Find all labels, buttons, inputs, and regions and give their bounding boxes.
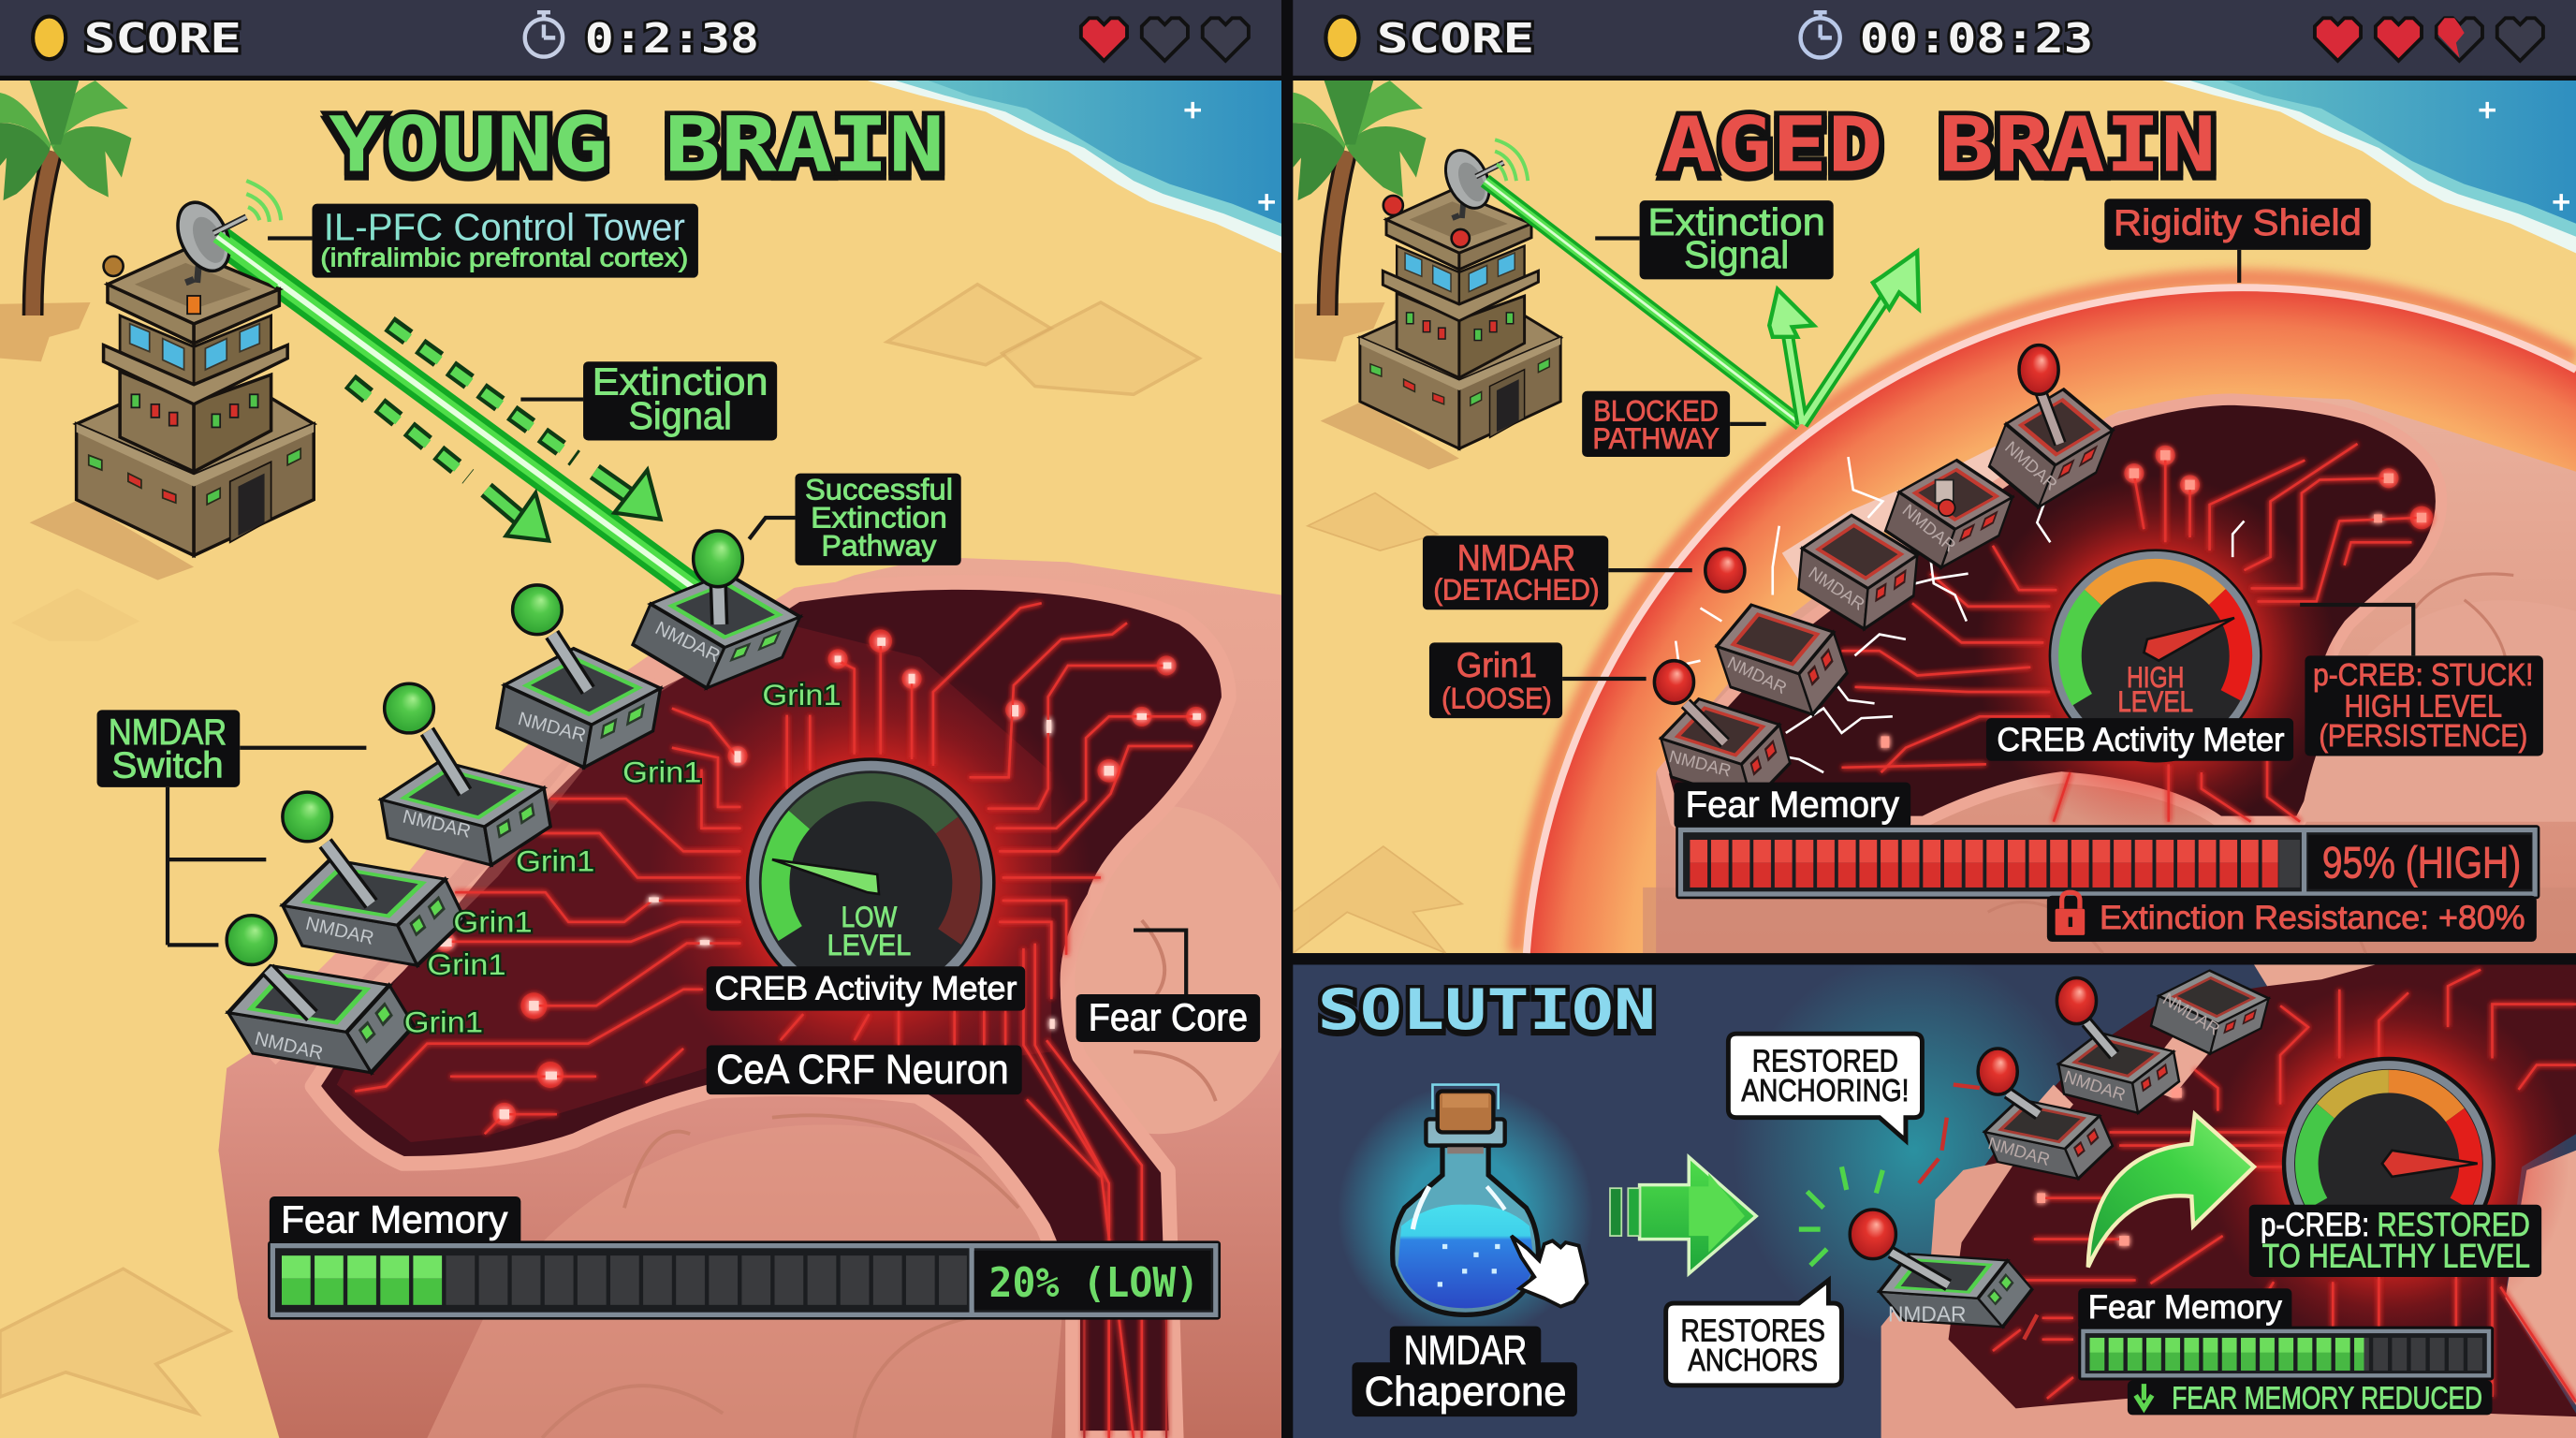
fear memory reduced note: FEAR MEMORY REDUCED — [2172, 1381, 2482, 1416]
panel: aged brain — [1271, 0, 2576, 953]
icon: down arrow — [2136, 1384, 2152, 1408]
fear memory meter: 95 percent: Fear Memory — [1686, 785, 1900, 825]
switch 3: NMDAR — [1805, 563, 1868, 614]
potion glow — [1338, 1085, 1593, 1341]
callout: Grin1 loose: (LOOSE) — [1442, 682, 1552, 715]
gauge reading — [829, 906, 911, 955]
switch 5 — [1650, 695, 1800, 806]
switch: top: NMDAR — [2159, 989, 2223, 1039]
speech bubble: restored anchoring: RESTORED — [1752, 1045, 1898, 1079]
switch: restored green — [1850, 1210, 2056, 1343]
ocean — [868, 81, 1281, 253]
Grin1 labels: Grin1 — [762, 678, 842, 712]
callout: fear core: Fear Core — [1089, 996, 1248, 1039]
speech bubble: restored anchoring — [1728, 1034, 1922, 1140]
aged tower — [1321, 139, 1560, 469]
callout: NMDAR switch: Switch — [111, 745, 224, 785]
score label: SCORE — [1377, 15, 1534, 63]
gauge needle — [772, 859, 879, 894]
extinction resistance readout — [2047, 892, 2537, 942]
switch 5: NMDAR — [253, 1029, 325, 1064]
callout: extinction signal: Signal — [1684, 233, 1789, 276]
Grin1 labels: Grin1 — [427, 947, 506, 981]
callout: successful extinction pathway: Extinction — [811, 500, 947, 534]
switch 2 — [1875, 455, 2023, 573]
Grin1 labels: Grin1 — [453, 904, 533, 938]
callout: p-CREB stuck: p-CREB: STUCK! — [2313, 658, 2533, 693]
pink band under switches — [263, 649, 690, 1051]
CREB gauge — [745, 757, 996, 966]
label: NMDAR chaperone: NMDAR — [1404, 1328, 1527, 1373]
label: NMDAR chaperone — [1352, 1327, 1577, 1416]
switch 2 — [491, 585, 666, 772]
switch 4: NMDAR — [1724, 653, 1790, 697]
extinction resistance readout: Extinction Resistance: +80% — [2100, 900, 2525, 936]
lives hearts — [2315, 18, 2543, 61]
palm tree — [1271, 81, 1426, 361]
callout: blocked pathway: BLOCKED — [1593, 393, 1719, 427]
extinction signal arrows — [350, 324, 661, 541]
callout: p-CREB stuck: HIGH LEVEL — [2345, 689, 2502, 724]
gauge needle — [2382, 1151, 2478, 1177]
callout: p-CREB stuck: (PERSISTENCE) — [2319, 719, 2527, 754]
switch 3 — [1795, 509, 1920, 635]
beach scene — [0, 81, 1298, 1438]
deflected arrows — [1769, 252, 1919, 424]
callout: Grin1 loose — [1429, 642, 1647, 718]
callout: p-CREB restored — [2249, 1205, 2541, 1277]
switch 4 — [1704, 601, 1860, 718]
Grin1 labels: Grin1 — [516, 844, 594, 877]
speech bubble: restores anchors — [1666, 1280, 1841, 1386]
switch 3: NMDAR — [401, 807, 473, 843]
gauge reading: HIGH — [2127, 660, 2184, 694]
timer: 00:08:23 — [1860, 15, 2093, 63]
callout: NMDAR detached: (DETACHED) — [1433, 573, 1600, 607]
CREB gauge — [2049, 549, 2262, 763]
neural circuit traces — [1841, 444, 2433, 822]
icon: stopwatch — [1801, 12, 1840, 57]
rigidity shield dome — [1516, 278, 2576, 953]
icon: potion flask — [1393, 1085, 1538, 1314]
callout: p-CREB stuck — [2300, 605, 2543, 756]
gauge reading: LOW — [842, 900, 897, 933]
speech bubble: restored anchoring: ANCHORING! — [1741, 1074, 1909, 1108]
fear memory meter: 20 percent: Fear Memory — [281, 1198, 508, 1241]
label: CeA CRF neuron: CeA CRF Neuron — [716, 1047, 1009, 1093]
CeA glow behind meter — [663, 675, 1081, 1045]
switch 1: NMDAR — [651, 618, 724, 667]
signal waves — [246, 181, 281, 222]
switch 1 — [631, 529, 803, 691]
Grin1 labels: Grin1 — [404, 1005, 483, 1038]
beach scene — [1271, 81, 2576, 953]
gauge: restored p-CREB — [2282, 1057, 2496, 1270]
callout: successful extinction pathway: Successful — [805, 473, 953, 506]
switch: middle — [2053, 977, 2185, 1117]
gauge needle — [2144, 618, 2234, 661]
switch 4: NMDAR — [303, 914, 375, 949]
callout: rigidity shield: Rigidity Shield — [2114, 203, 2362, 243]
title: aged brain: AGED BRAIN — [1661, 102, 2217, 190]
callout: IL-PFC control tower — [268, 204, 698, 278]
dark neuron cavity — [1662, 400, 2441, 822]
electric sparks — [1676, 457, 2244, 772]
fear memory meter: 95 percent: 95% (HIGH) — [2322, 838, 2521, 888]
switch 3 — [374, 683, 557, 868]
fear memory meter: 20 percent: 20% (LOW) — [989, 1259, 1199, 1307]
callout: NMDAR detached — [1423, 536, 1692, 609]
header bar: young brain — [0, 0, 1281, 76]
callout: extinction signal — [520, 360, 777, 440]
callout: rigidity shield — [2104, 198, 2371, 283]
neural circuit traces — [1993, 970, 2576, 1401]
title: solution: SOLUTION — [1318, 978, 1656, 1043]
Grin1 labels — [404, 678, 842, 1038]
panel: solution — [1293, 953, 2576, 1438]
label: CREB activity meter: CREB Activity Meter — [1997, 722, 2285, 758]
speech bubble: restores anchors: ANCHORS — [1688, 1343, 1818, 1378]
switch 5 — [225, 914, 416, 1076]
ocean — [2162, 81, 2576, 253]
loose knobs — [1654, 549, 1745, 703]
callout: NMDAR detached: NMDAR — [1457, 538, 1575, 579]
callout: p-CREB restored: TO HEALTHY LEVEL — [2262, 1238, 2530, 1274]
tower: IL-PFC control tower — [30, 181, 314, 580]
callout: NMDAR switch: NMDAR — [109, 712, 227, 753]
fear memory meter: 95 percent — [1674, 783, 2539, 899]
callout: successful extinction pathway — [749, 473, 961, 565]
icon: padlock — [2056, 892, 2085, 935]
brain tissue — [1643, 394, 2576, 953]
brain tissue — [218, 557, 1298, 1438]
label: NMDAR chaperone: Chaperone — [1365, 1369, 1566, 1415]
switch: restored green: NMDAR — [1888, 1301, 1967, 1326]
gauge reading: LEVEL — [2117, 684, 2193, 718]
NMDAR switches — [205, 531, 813, 1084]
callout: NMDAR switch — [97, 710, 366, 945]
switch: top — [2145, 967, 2275, 1057]
blocked green beam — [1486, 181, 1801, 424]
icon: stopwatch — [525, 12, 563, 57]
gauge reading: LEVEL — [827, 928, 911, 961]
icon: pointing hand — [1512, 1236, 1587, 1307]
sand dunes — [0, 285, 1199, 1414]
Grin1 labels: Grin1 — [622, 756, 701, 789]
callout: extinction signal: Signal — [628, 394, 732, 437]
signal waves — [1495, 139, 1528, 181]
callout: fear core — [1076, 931, 1260, 1042]
callout: successful extinction pathway: Pathway — [822, 528, 937, 562]
dark neuron cavity — [312, 582, 1229, 1438]
fear memory meter: reduced: Fear Memory — [2088, 1289, 2282, 1326]
switch 2: NMDAR — [516, 709, 588, 746]
callout: Grin1 loose: Grin1 — [1456, 646, 1537, 684]
score label: SCORE — [84, 15, 242, 63]
switch 4 — [279, 790, 467, 968]
callout: IL-PFC control tower: IL-PFC Control Tower — [324, 205, 685, 248]
speech bubble: restores anchors: RESTORES — [1680, 1313, 1825, 1348]
label: CREB activity meter: CREB Activity Meter — [714, 970, 1017, 1006]
timer: 0:2:38 — [585, 15, 759, 63]
teal glow near switch — [1734, 953, 2095, 1347]
switch: middle: NMDAR — [2062, 1066, 2128, 1105]
switch 1: NMDAR — [2001, 437, 2061, 494]
arrow: curved green rise — [2088, 1114, 2254, 1267]
callout: extinction signal — [1595, 200, 1834, 279]
header bar: aged brain — [1293, 0, 2576, 76]
fear memory meter: 20 percent — [268, 1196, 1221, 1320]
lives hearts — [1081, 18, 1249, 61]
neural circuit traces — [355, 603, 1206, 1438]
detached NMDAR switches — [1650, 345, 2126, 806]
sand dunes — [1293, 493, 1462, 953]
callout: p-CREB restored: p-CREB: RESTORED — [2261, 1207, 2530, 1243]
callout: extinction signal: Extinction — [593, 360, 768, 403]
switch: lower — [1972, 1049, 2125, 1185]
callout: IL-PFC control tower: (infralimbic prefrontal cortex) — [320, 242, 688, 271]
palm tree — [0, 81, 131, 361]
switch: lower: NMDAR — [1986, 1133, 2052, 1169]
fear memory meter: reduced — [2078, 1288, 2494, 1381]
switch 2: NMDAR — [1899, 500, 1960, 556]
switch 1 — [1976, 345, 2126, 513]
NMDAR switches being restored — [1850, 967, 2275, 1343]
gauge reading — [2117, 660, 2193, 718]
icon: score coin — [1325, 17, 1358, 59]
restoration sparks — [1799, 1085, 2037, 1340]
icon: score coin — [33, 17, 66, 59]
switch 5: NMDAR — [1667, 746, 1734, 781]
callout: extinction signal: Extinction — [1647, 200, 1825, 243]
green control beam — [218, 239, 698, 592]
brain tissue and neuron field — [1881, 964, 2576, 1438]
callout: blocked pathway: PATHWAY — [1593, 421, 1720, 455]
callout: blocked pathway — [1582, 391, 1766, 457]
title: young brain: YOUNG BRAIN — [329, 102, 944, 190]
arrow: potion to switch — [1610, 1157, 1756, 1273]
panel: young brain — [0, 0, 1298, 1438]
